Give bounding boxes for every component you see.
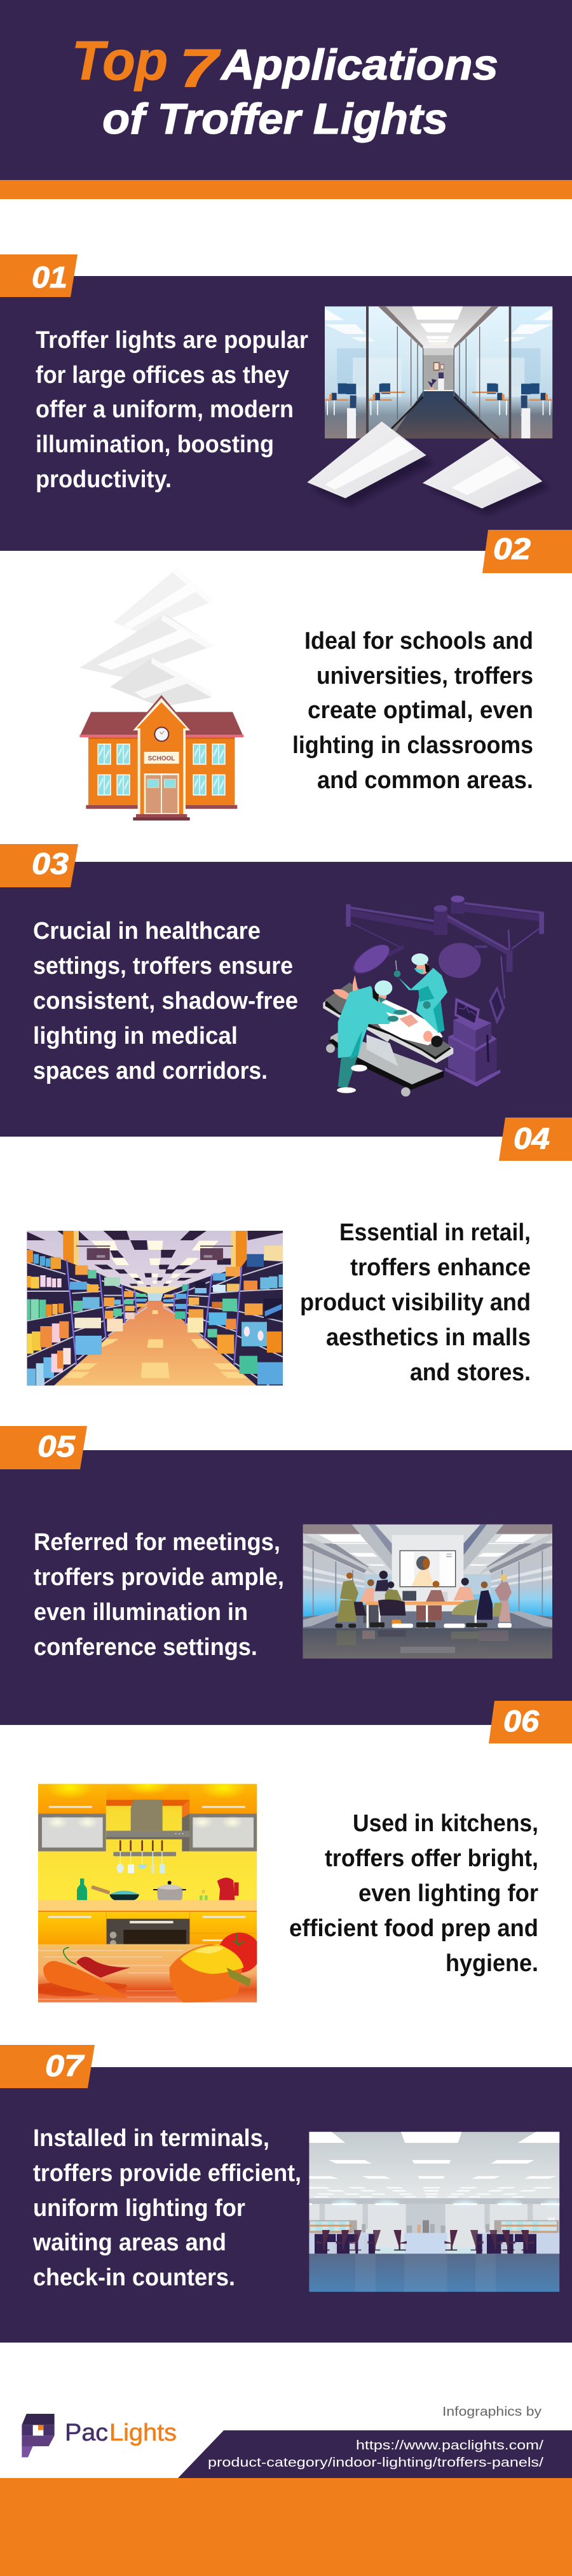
- icon: surgical lamp arms: [346, 896, 544, 999]
- tag 01: [0, 254, 78, 297]
- panel: 03 healthcare: [0, 844, 572, 1137]
- icon: bottle: [77, 1878, 87, 1901]
- text: conference: conference settings.: [34, 1634, 257, 1661]
- text: schools: create optimal, even: [308, 697, 533, 724]
- tag 03: [0, 844, 78, 887]
- illustration: supermarket aisle: [27, 1231, 283, 1385]
- icon: logo mark: [22, 2414, 55, 2457]
- illustration: school with troffers: [79, 568, 243, 821]
- icon: red jug: [217, 1878, 238, 1903]
- text: retail: aesthetics in malls: [326, 1324, 531, 1351]
- text: kitchens: even lighting for: [358, 1880, 538, 1907]
- footer: [0, 2343, 572, 2576]
- text: retail: Essential in retail,: [339, 1219, 531, 1246]
- icon: right troffer: [423, 438, 548, 514]
- icon: left troffer: [307, 422, 432, 506]
- tag 01: 01: [32, 260, 67, 294]
- text: terminals: waiting areas and: [32, 2229, 226, 2256]
- text: offices: for large offices as they: [36, 362, 289, 389]
- title: [72, 31, 498, 143]
- credit label: Infographics by: [442, 2405, 541, 2419]
- logo: PacLights: [22, 2414, 177, 2457]
- illustration: conference room: [303, 1525, 552, 1658]
- illustration: surgery room: [323, 896, 544, 1097]
- tag 06: 06: [503, 1704, 540, 1738]
- text: healthcare: consistent, shadow-free: [33, 988, 298, 1014]
- illustration: office corridor with troffer lights: [307, 307, 570, 514]
- illustration: terminal hall: [309, 2132, 566, 2292]
- icon: tomato: [220, 1932, 257, 1973]
- icon: cruet: [200, 1890, 208, 1901]
- text: terminals: check-in counters.: [33, 2264, 235, 2291]
- icon: chili: [64, 1948, 130, 1977]
- text: kitchens: efficient food prep and: [289, 1915, 538, 1942]
- text: healthcare: [33, 918, 298, 1084]
- shelves: [309, 2217, 559, 2233]
- title: of Troffer Lights: [102, 95, 448, 143]
- text: kitchens: Used in kitchens,: [353, 1810, 538, 1837]
- panel: 01 offices: [0, 254, 572, 551]
- text: terminals: [32, 2125, 301, 2291]
- text: healthcare: Crucial in healthcare: [33, 918, 261, 945]
- icon: left lamp: [348, 939, 394, 980]
- left shelf products: [27, 1250, 146, 1385]
- illustration: kitchen: [38, 1776, 261, 2002]
- tag 04: [499, 1118, 572, 1161]
- logo: PacLights: Lights: [109, 2420, 177, 2446]
- text: kitchens: [289, 1810, 538, 1977]
- text: terminals: Installed in terminals,: [33, 2125, 269, 2152]
- tag 05: 05: [37, 1429, 76, 1463]
- icon: chairs: [317, 2230, 535, 2250]
- text: retail: product visibility and: [300, 1289, 531, 1316]
- icon: right lamp: [439, 943, 481, 978]
- icon: surgeon: [337, 980, 407, 1093]
- right shelf products: [163, 1245, 283, 1385]
- title: 7: [179, 38, 221, 98]
- icon: pepper: [170, 1944, 251, 2002]
- icon: left lamp face: [350, 939, 394, 978]
- text: schools: and common areas.: [317, 767, 533, 794]
- url band: [178, 2430, 572, 2478]
- text: conference: troffers provide ample,: [34, 1564, 284, 1591]
- panel: 07 terminals: [0, 2045, 572, 2343]
- tag 03: 03: [32, 847, 69, 880]
- text: offices: offer a uniform, modern: [36, 396, 294, 423]
- text: healthcare: spaces and corridors.: [33, 1058, 268, 1084]
- text: schools: lighting in classrooms: [292, 732, 533, 759]
- text: conference: [34, 1529, 284, 1661]
- text: offices: illumination, boosting: [36, 431, 274, 458]
- text: terminals: uniform lighting for: [33, 2195, 245, 2222]
- tag 07: [0, 2045, 95, 2088]
- bottom orange band: [0, 2478, 572, 2576]
- text: offices: [36, 327, 308, 493]
- icon: patient: [332, 975, 443, 1047]
- icon: school building: SCHOOL: [148, 756, 175, 763]
- text: terminals: troffers provide efficient,: [33, 2160, 301, 2187]
- text: schools: universities, troffers: [317, 663, 533, 689]
- icon: wall monitor: [489, 986, 505, 1025]
- text: healthcare: settings, troffers ensure: [33, 953, 293, 980]
- icon: pan: [92, 1885, 139, 1901]
- panel: 05 conference: [0, 1426, 572, 1725]
- counters: [309, 2233, 559, 2254]
- text: offices: productivity.: [36, 466, 172, 493]
- text: schools: [292, 628, 533, 794]
- url band: https://www.paclights.com/: [356, 2439, 544, 2453]
- people and table: [335, 1570, 512, 1628]
- icon: pot: [153, 1881, 186, 1902]
- tag 02: 02: [493, 532, 531, 565]
- icon: carrot: [43, 1961, 128, 1998]
- icon: nurse: [394, 953, 447, 1033]
- panel: 06 kitchens: [38, 1701, 572, 2002]
- text: schools: Ideal for schools and: [304, 628, 533, 654]
- icon: school building: [79, 695, 243, 821]
- text: retail: troffers enhance: [350, 1254, 531, 1281]
- text: retail: [300, 1219, 531, 1386]
- tag 04: 04: [514, 1121, 550, 1155]
- text: conference: Referred for meetings,: [34, 1529, 280, 1556]
- logo: PacLights: Pac: [65, 2420, 108, 2446]
- url band: product-category/indoor-lighting/troffers-panels/: [208, 2456, 544, 2470]
- text: offices: Troffer lights are popular: [36, 327, 308, 354]
- title: Top: [72, 31, 168, 92]
- text: healthcare: lighting in medical: [33, 1023, 238, 1049]
- icon: stacked troffers: [79, 568, 215, 707]
- text: kitchens: hygiene.: [446, 1950, 538, 1977]
- panel: 02 schools: [0, 530, 572, 862]
- text: conference: even illumination in: [34, 1599, 248, 1626]
- icon: monitoring equipment: [445, 997, 500, 1086]
- tag 05: [0, 1426, 87, 1469]
- tag 02: [482, 530, 572, 573]
- icon: operating table: [323, 983, 453, 1097]
- header banner: [0, 0, 572, 199]
- panel: 04 retail: [27, 1118, 572, 1385]
- text: retail: and stores.: [410, 1359, 531, 1386]
- screen: [400, 1550, 456, 1587]
- tag 07: 07: [45, 2049, 85, 2082]
- text: kitchens: troffers offer bright,: [325, 1845, 538, 1872]
- title: Applications: [220, 41, 498, 89]
- tag 06: [489, 1701, 572, 1743]
